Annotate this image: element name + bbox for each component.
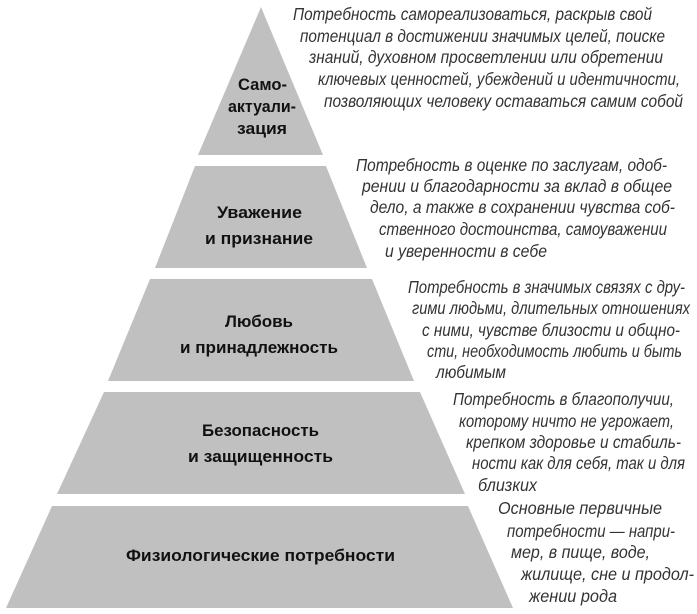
tier 4 label xyxy=(188,421,333,466)
tier 3 label xyxy=(180,312,338,357)
tier 1 label: Само- xyxy=(238,75,287,94)
tier 4 description: близких xyxy=(478,475,538,495)
tier 3: love and belonging xyxy=(108,279,414,381)
tier 3 label: Любовь xyxy=(225,312,293,331)
tier 2 description: и уверенности в себе xyxy=(385,241,547,261)
tier 4 label: Безопасность xyxy=(202,421,319,440)
tier 1 label: зация xyxy=(237,119,287,138)
tier 2 description: рении и благодарности за вклад в общее xyxy=(361,176,672,196)
tier 1 description xyxy=(293,4,683,111)
tier 5 description: мер, в пище, воде, xyxy=(511,542,650,562)
tier 2 label: Уважение xyxy=(217,203,302,222)
tier 2 label: и признание xyxy=(205,229,313,248)
tier 5 description: жении рода xyxy=(528,586,617,606)
tier 5 label: Физиологические потребности xyxy=(126,546,395,565)
tier 3 label: и принадлежность xyxy=(180,338,338,357)
tier 2 label xyxy=(205,203,313,248)
tier 1 label xyxy=(228,75,296,138)
tier 1: self-actualization xyxy=(198,7,323,155)
tier 3 description: любимым xyxy=(435,362,506,382)
tier 1 description: знаний, духовном просветлении или обретении xyxy=(308,47,663,67)
tier 4 label: и защищенность xyxy=(188,447,333,466)
tier 5 description: Основные первичные xyxy=(498,498,662,518)
tier 4 description xyxy=(453,389,685,495)
tier 5 description xyxy=(498,498,694,606)
tier 2: esteem xyxy=(155,166,367,268)
tier 1 label: актуали- xyxy=(228,97,296,116)
tier 3 description xyxy=(408,277,691,382)
tier 4: safety xyxy=(57,392,465,494)
tier 5: physiological needs xyxy=(6,506,513,608)
tier 1 description: Потребность самореализоваться, раскрыв свой xyxy=(293,4,652,24)
tier 2 description xyxy=(356,155,675,261)
